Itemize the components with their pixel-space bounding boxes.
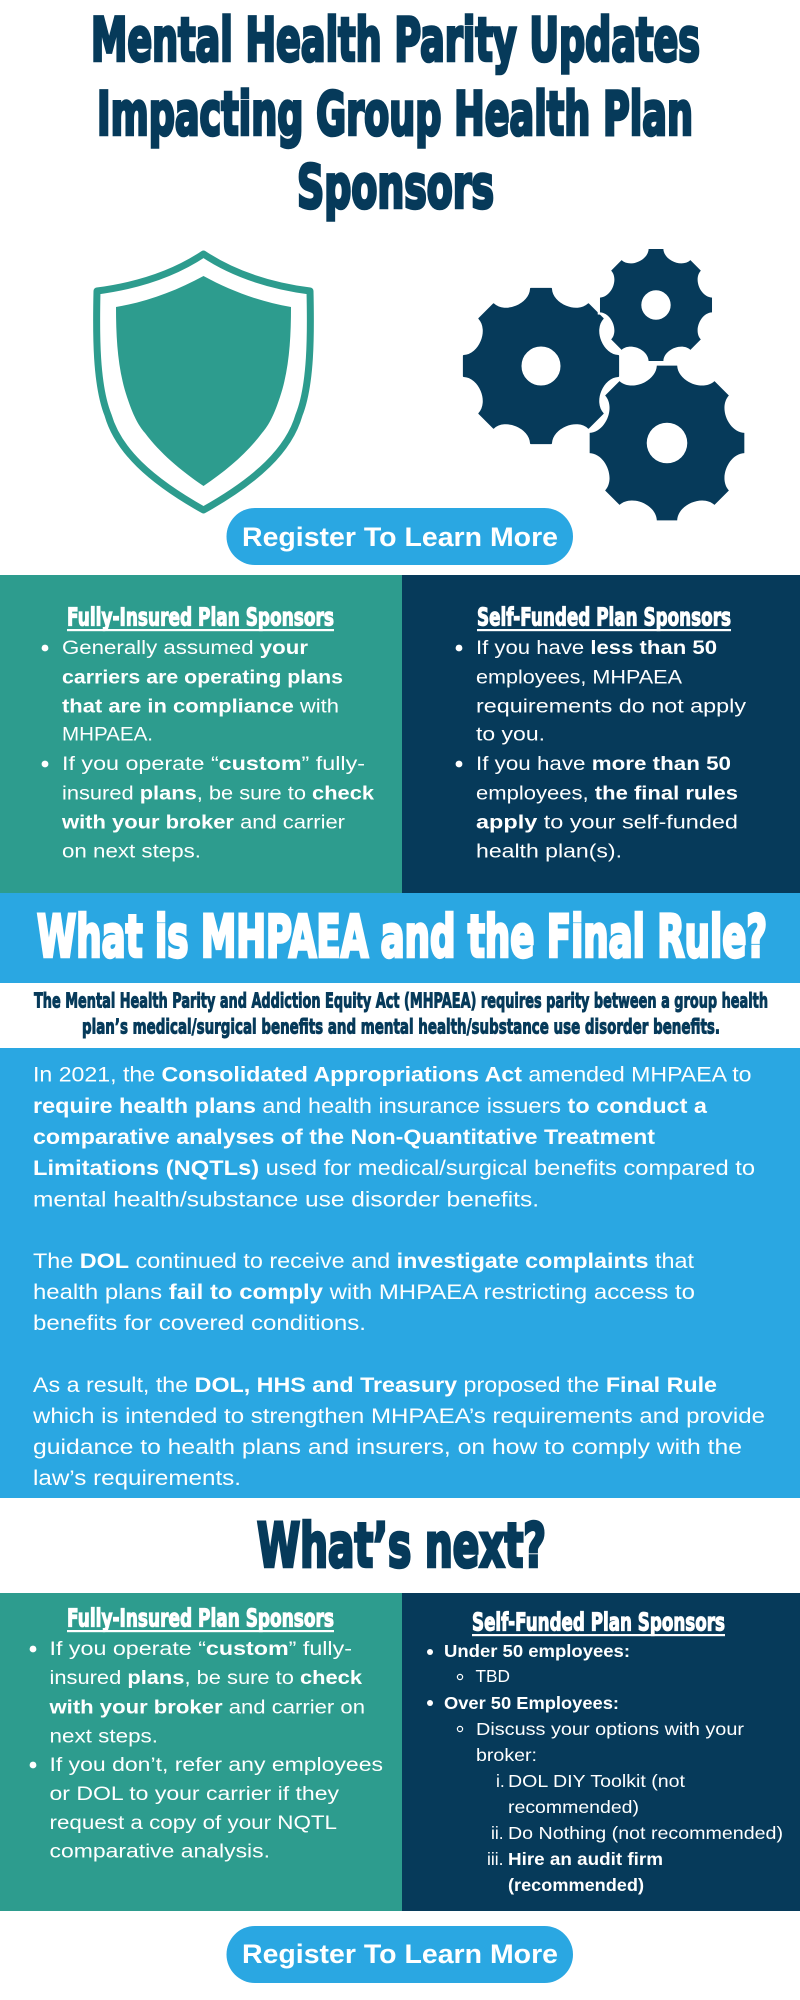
paragraph: 2021 amendment: comparative analyses of the Non-Quantitative Treatment bbox=[33, 1125, 655, 1149]
bullet list: next fully-insured bbox=[30, 1639, 383, 1863]
heading: fully-insured: Fully-Insured Plan Sponsors bbox=[67, 602, 334, 631]
bullet list: fully-insured: Generally assumed your bbox=[62, 638, 309, 659]
nested list: next self-funded: broker: bbox=[476, 1745, 537, 1765]
nested list: next self-funded: (recommended) bbox=[508, 1875, 644, 1895]
paragraph: final rule: As a result, the DOL, HHS and Treasury proposed the Final Rule bbox=[33, 1373, 717, 1397]
bullet list: fully-insured: MHPAEA. bbox=[62, 725, 153, 746]
paragraph: 2021 amendment: mental health/substance use disorder benefits. bbox=[33, 1188, 539, 1212]
paragraph: DOL complaints: The DOL continued to receive and investigate complaints that bbox=[33, 1249, 694, 1273]
nested list: next self-funded: i. bbox=[496, 1771, 505, 1791]
nested list: next self-funded bbox=[427, 1641, 783, 1895]
bullet list: next fully-insured: comparative analysis. bbox=[50, 1842, 270, 1863]
bullet list: self-funded: health plan(s). bbox=[476, 841, 622, 862]
title bbox=[91, 6, 700, 222]
paragraph: 2021 amendment: Limitations (NQTLs) used for medical/surgical benefits compared to bbox=[33, 1156, 755, 1180]
panel: self-funded plan sponsors bbox=[402, 575, 800, 893]
bullet list: next fully-insured: next steps. bbox=[50, 1726, 158, 1747]
nested list: next self-funded: recommended) bbox=[508, 1797, 639, 1817]
icon: gears bbox=[464, 249, 744, 520]
bullet list: next fully-insured: or DOL to your carrier if they bbox=[50, 1784, 340, 1805]
bullet list: self-funded: to you. bbox=[476, 725, 545, 746]
bullet list: self-funded: requirements do not apply bbox=[476, 696, 747, 717]
panel: next steps self-funded bbox=[402, 1593, 800, 1911]
bullet list: self-funded: apply to your self-funded bbox=[476, 812, 738, 833]
bullet list: fully-insured: with your broker and carrier bbox=[61, 812, 346, 833]
bullet list: self-funded bbox=[456, 638, 747, 862]
nested list: next self-funded: Under 50 employees: bbox=[444, 1641, 630, 1661]
bullet list: next fully-insured: with your broker and carrier on bbox=[48, 1697, 365, 1718]
nested list: next self-funded: ii. bbox=[491, 1823, 504, 1843]
nested list: next self-funded: DOL DIY Toolkit (not bbox=[508, 1771, 685, 1791]
heading: next fully-insured: Fully-Insured Plan Sponsors bbox=[67, 1603, 334, 1632]
title: Sponsors bbox=[297, 152, 494, 222]
icon: shield bbox=[97, 254, 310, 510]
button: register bottom: Register To Learn More bbox=[242, 1939, 558, 1969]
nested list: next self-funded: Hire an audit firm bbox=[508, 1849, 663, 1869]
panel: next steps fully-insured bbox=[0, 1593, 402, 1911]
bullet list: next fully-insured: If you don’t, refer any employees bbox=[50, 1755, 383, 1776]
bullet list: self-funded: If you have less than 50 bbox=[476, 638, 717, 659]
paragraph: final rule: which is intended to strengthen MHPAEA’s requirements and provide bbox=[32, 1404, 765, 1428]
bullet list: self-funded: employees, MHPAEA bbox=[476, 667, 682, 688]
bullet list: self-funded: employees, the final rules bbox=[476, 783, 738, 804]
button: register top bbox=[226, 508, 573, 565]
paragraph: DOL complaints bbox=[33, 1249, 695, 1335]
nested list: next self-funded: Do Nothing (not recommended) bbox=[508, 1823, 783, 1843]
button: register top: Register To Learn More bbox=[242, 522, 558, 552]
bullet list: fully-insured: If you operate “ custom ” fully- bbox=[62, 754, 365, 775]
bullet list: next fully-insured: request a copy of your NQTL bbox=[50, 1813, 337, 1834]
bullet list: fully-insured bbox=[42, 638, 374, 862]
bullet list: next fully-insured: insured plans , be sure to check bbox=[50, 1668, 362, 1689]
nested list: next self-funded: Over 50 Employees: bbox=[444, 1693, 619, 1713]
panel: fully-insured plan sponsors bbox=[0, 575, 402, 893]
paragraph: DOL complaints: benefits for covered conditions. bbox=[33, 1311, 366, 1335]
bullet list: fully-insured: on next steps. bbox=[62, 841, 201, 862]
paragraph: final rule bbox=[32, 1373, 765, 1490]
subheading: MHPAEA definition bbox=[34, 988, 768, 1038]
nested list: next self-funded: Discuss your options with your bbox=[476, 1719, 744, 1739]
paragraph: final rule: guidance to health plans and insurers, on how to comply with the bbox=[33, 1435, 742, 1459]
bullet list: fully-insured: carriers are operating plans bbox=[62, 667, 343, 688]
paragraph: 2021 amendment: require health plans and health insurance issuers to conduct a bbox=[33, 1094, 708, 1118]
paragraph: final rule: law’s requirements. bbox=[33, 1466, 241, 1490]
paragraph: 2021 amendment bbox=[33, 1063, 755, 1212]
nested list: next self-funded: TBD bbox=[476, 1666, 510, 1686]
bullet list: fully-insured: insured plans , be sure to check bbox=[62, 783, 374, 804]
bullet list: next fully-insured: If you operate “ custom ” fully- bbox=[50, 1639, 352, 1660]
nested list: next self-funded: iii. bbox=[487, 1849, 504, 1869]
button: register bottom bbox=[226, 1926, 573, 1983]
panel: MHPAEA explanation bbox=[0, 1048, 800, 1498]
paragraph: 2021 amendment: In 2021, the Consolidated Appropriations Act amended MHPAEA to bbox=[33, 1063, 752, 1087]
heading: what's next: What’s next? bbox=[257, 1510, 546, 1581]
bullet list: self-funded: If you have more than 50 bbox=[476, 754, 731, 775]
bullet list: fully-insured: that are in compliance with bbox=[62, 696, 339, 717]
paragraph: DOL complaints: health plans fail to comply with MHPAEA restricting access to bbox=[33, 1280, 695, 1304]
